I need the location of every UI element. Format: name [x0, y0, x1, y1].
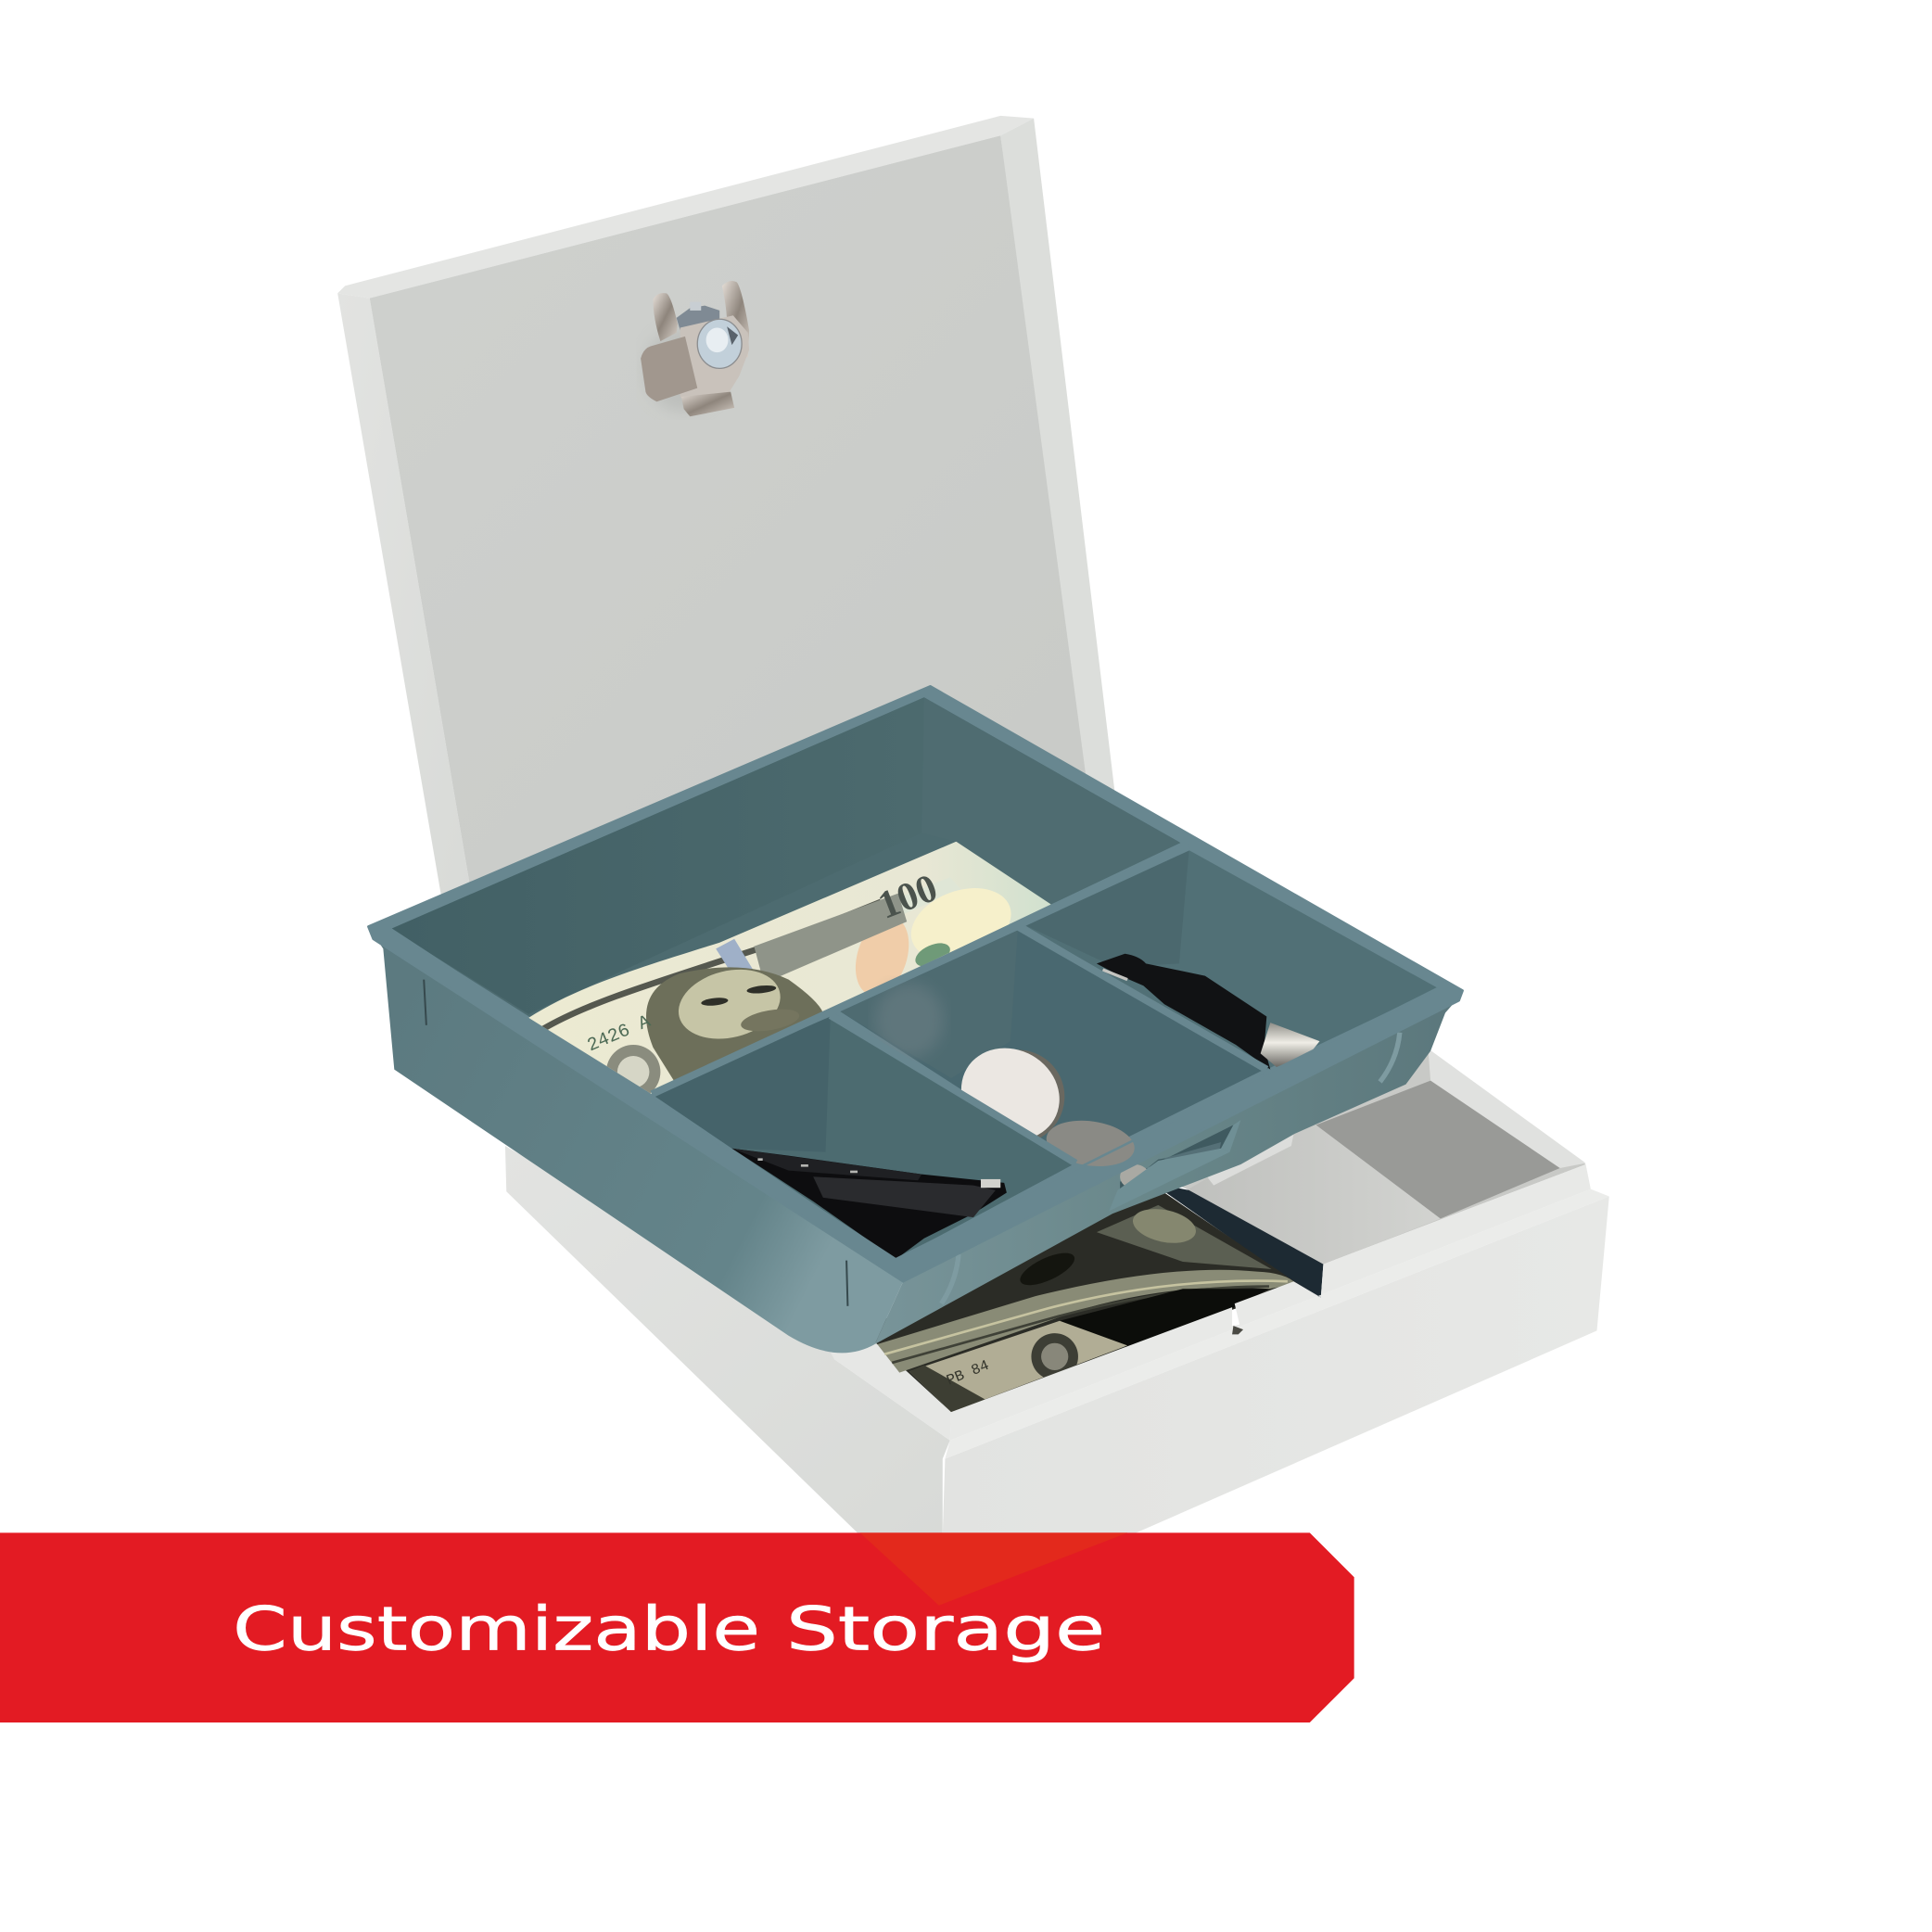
black gap — [1060, 1289, 1269, 1348]
infographic canvas — [0, 116, 1609, 1722]
plate — [680, 315, 749, 407]
thumb flap — [641, 337, 697, 401]
pen compartment — [652, 1016, 1075, 1259]
banner text: Customizable — [233, 1595, 760, 1665]
base interior backing — [1146, 1041, 1586, 1265]
left prong — [653, 293, 678, 341]
notch — [1232, 1326, 1243, 1334]
denomination: 100 — [872, 866, 943, 928]
banner text: Storage — [786, 1595, 1105, 1665]
blue security strip — [716, 938, 753, 970]
nut — [677, 306, 719, 330]
lid lock latch — [641, 281, 749, 416]
banknote with portrait — [517, 838, 1060, 1103]
tray right front face — [875, 993, 1463, 1344]
portrait hair — [646, 967, 822, 1080]
top band of note — [543, 902, 881, 1029]
banner shape — [0, 1532, 1354, 1722]
right wall — [922, 697, 1180, 905]
peach strip — [856, 923, 909, 992]
folded edge of notes — [877, 1270, 1296, 1373]
back wall — [390, 697, 924, 1014]
cream watermark oval — [911, 888, 1010, 959]
right prong — [722, 281, 749, 357]
base front face — [943, 1197, 1609, 1538]
portrait face — [679, 970, 781, 1038]
banner text — [233, 1595, 1105, 1665]
lid right strip — [1000, 119, 1119, 838]
lighter strip under tray — [1205, 1127, 1295, 1186]
large compartment — [390, 697, 1180, 1103]
box base — [505, 1041, 1609, 1538]
serial number: 2426 A — [584, 1010, 654, 1056]
base front inner band — [950, 1164, 1591, 1441]
small text block — [754, 894, 907, 984]
lower note — [909, 1321, 1127, 1412]
back-left wall — [840, 930, 1018, 1078]
cash box lid — [337, 116, 1119, 924]
lid left strip — [337, 293, 475, 924]
keys compartment — [1023, 850, 1438, 1070]
black key fob — [731, 1149, 1007, 1259]
red banner — [0, 1532, 1354, 1722]
folded banknotes in base — [862, 1183, 1300, 1412]
tray ribs — [424, 980, 847, 1306]
screw head — [697, 319, 742, 368]
base left face — [505, 1146, 950, 1538]
green bell — [915, 943, 950, 966]
grey compartment floor — [1187, 1125, 1441, 1265]
coins — [945, 1031, 1138, 1172]
tray handle — [1109, 1120, 1240, 1211]
lid inner panel — [370, 135, 1094, 912]
car keys — [1097, 954, 1319, 1070]
grey compartment back — [1316, 1081, 1560, 1218]
dark divider in base — [1152, 1183, 1323, 1298]
lid top rim — [337, 116, 1034, 299]
tray front rim lip — [390, 929, 1438, 1259]
tray dividers — [652, 846, 1266, 1163]
base left top band — [825, 1337, 951, 1441]
coins compartment — [840, 930, 1265, 1172]
base interior right wall — [1428, 1049, 1586, 1168]
folded banknotes in base: PB 84 — [945, 1357, 992, 1390]
tray left front face — [374, 934, 903, 1353]
seal — [606, 1045, 660, 1093]
tray rim — [368, 686, 1463, 1281]
base shoulder ledge — [945, 1189, 1609, 1459]
removable teal tray — [368, 686, 1463, 1353]
box reflection through banner — [860, 1532, 1127, 1606]
